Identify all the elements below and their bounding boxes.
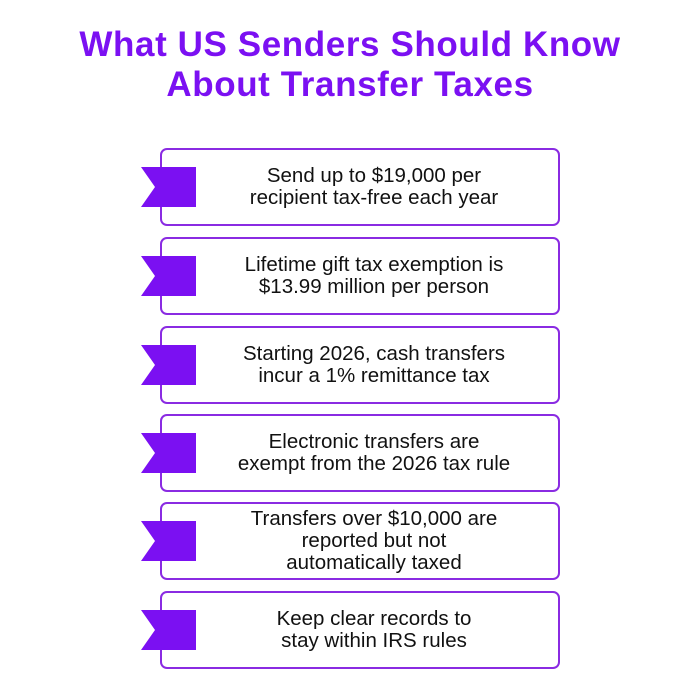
card 5: reported but not xyxy=(302,529,446,552)
card 1: recipient tax-free each year xyxy=(250,186,498,209)
card 5 xyxy=(160,502,560,580)
title: What US Senders Should Know xyxy=(79,25,621,64)
card 6: Keep clear records to xyxy=(277,607,471,630)
card 2 xyxy=(160,237,560,315)
card 6 xyxy=(160,591,560,669)
card 5: automatically taxed xyxy=(286,551,462,574)
card 6: stay within IRS rules xyxy=(281,629,467,652)
card 1 xyxy=(160,148,560,226)
card 3 xyxy=(160,326,560,404)
icon: ribbon 6 xyxy=(141,610,196,650)
title: About Transfer Taxes xyxy=(166,65,534,104)
icon: ribbon 2 xyxy=(141,256,196,296)
card 4 xyxy=(160,414,560,492)
card 5: Transfers over $10,000 are xyxy=(251,507,497,530)
card 2: $13.99 million per person xyxy=(259,275,489,298)
title xyxy=(79,25,621,104)
card 2: Lifetime gift tax exemption is xyxy=(245,253,503,276)
card 3: Starting 2026, cash transfers xyxy=(243,342,505,365)
icon: ribbon 1 xyxy=(141,167,196,207)
icon: ribbon 3 xyxy=(141,345,196,385)
icon: ribbon 5 xyxy=(141,521,196,561)
card 1: Send up to $19,000 per xyxy=(267,164,481,187)
icon: ribbon 4 xyxy=(141,433,196,473)
card 4: exempt from the 2026 tax rule xyxy=(238,452,510,475)
card 3: incur a 1% remittance tax xyxy=(258,364,490,387)
card 4: Electronic transfers are xyxy=(269,430,479,453)
